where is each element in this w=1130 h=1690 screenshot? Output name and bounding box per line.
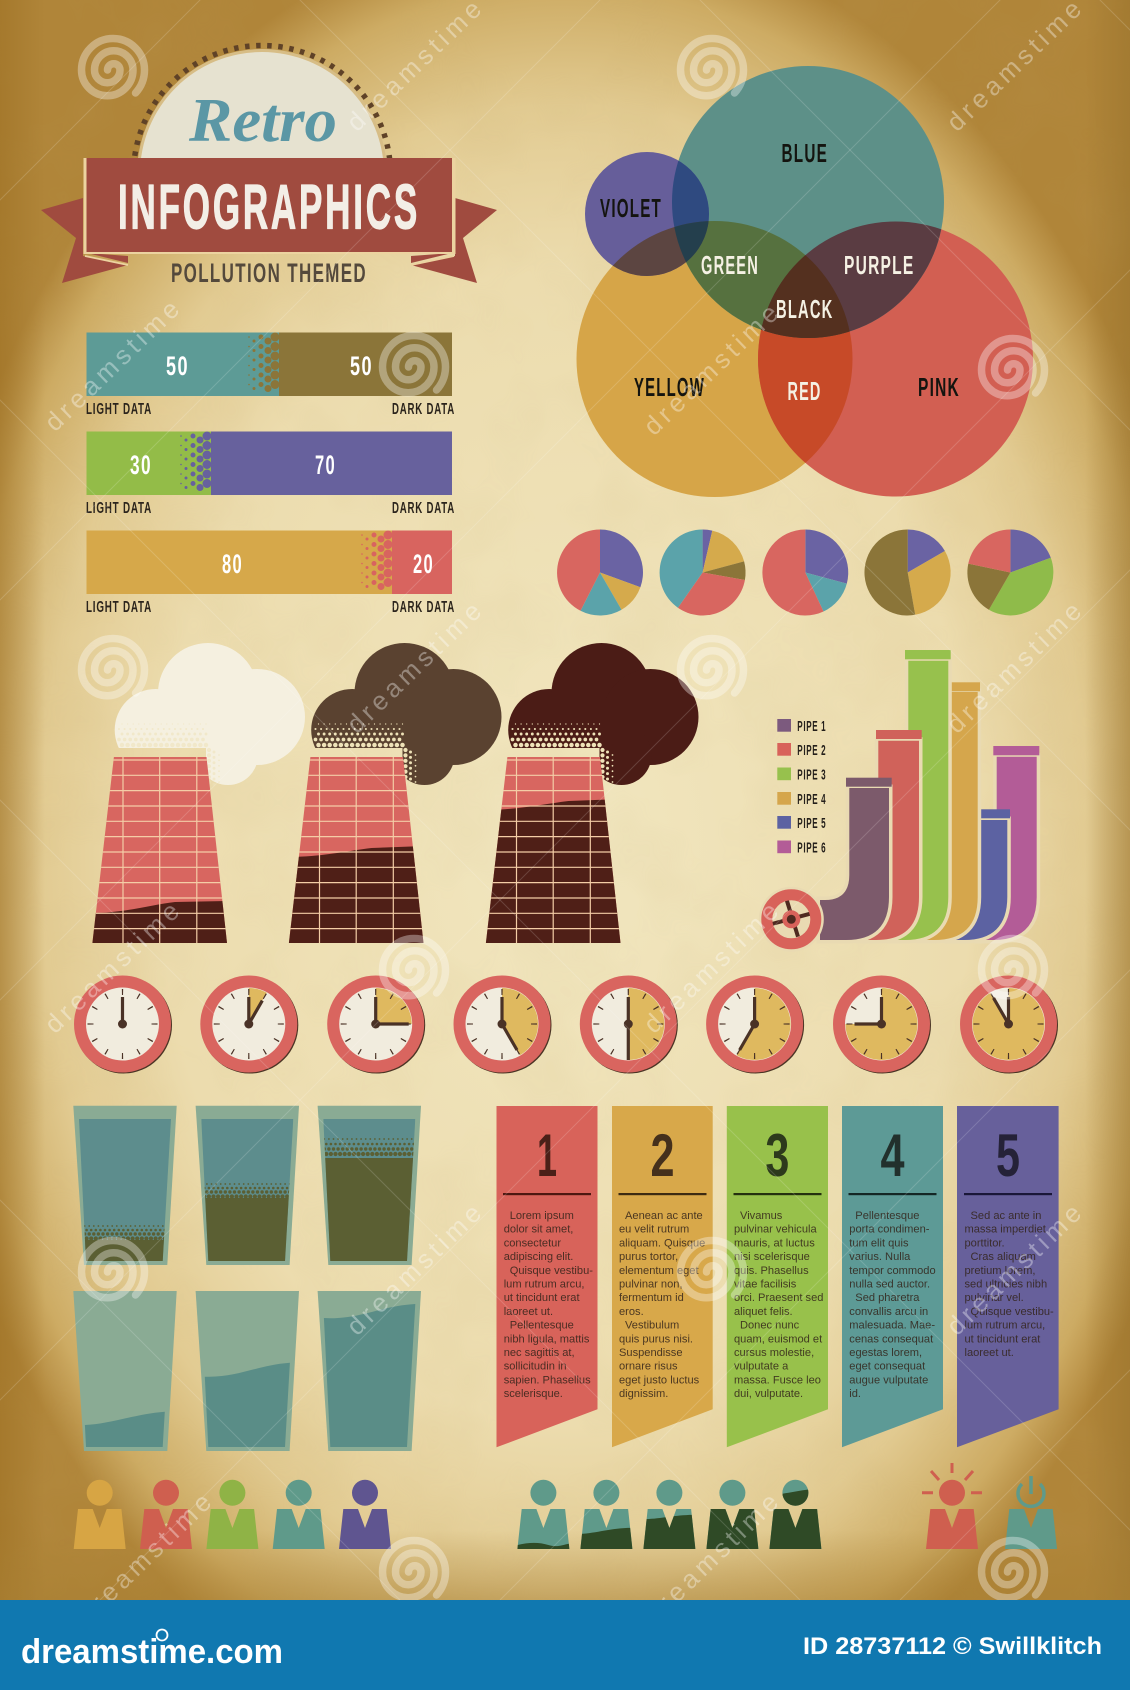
ribbon panel 1: nec sagittis at,: [504, 1347, 575, 1359]
ribbon panel 5: pulvinar vel.: [964, 1292, 1024, 1304]
footer bar: ID 28737112 © Swillklitch: [803, 1633, 1102, 1660]
venn diagram: PINK: [918, 372, 960, 402]
badge: retro seal: [132, 42, 392, 158]
ribbon panel 4: augue vulputate: [849, 1374, 928, 1386]
watermark text: dreamstime: [38, 294, 185, 437]
glass: water high: [318, 1291, 421, 1451]
ribbon panel 1: Pellentesque: [510, 1320, 574, 1332]
smokestack 2 with brown cloud: [286, 643, 502, 945]
ribbon tails: [41, 198, 497, 283]
ribbon panel 1: scelerisque.: [504, 1388, 563, 1400]
ribbon panel 2: purus tortor,: [619, 1251, 678, 1263]
ribbon banner edge: [84, 158, 456, 254]
data bar 2: LIGHT DATA: [86, 500, 152, 517]
watermark text: dreamstime: [940, 596, 1087, 739]
pipe bar chart: [820, 650, 1039, 940]
watermark text: dreamstime: [340, 1198, 487, 1341]
clock 11: [960, 976, 1058, 1074]
data bar 3: [86, 530, 455, 616]
footer bar: dreamstime.com: [21, 1633, 283, 1671]
ribbon panel 5: Quisque vestibu-: [970, 1306, 1054, 1318]
title: Infographics: INFOGRAPHICS: [118, 172, 420, 242]
ribbon panel 2: 2: [650, 1122, 674, 1189]
pipe legend: PIPE 4: [797, 791, 826, 808]
watermark swirls: [82, 38, 1044, 1598]
ribbon panel 4: cenas consequat: [849, 1333, 933, 1345]
ribbon panel 3: aliquet felis.: [734, 1306, 793, 1318]
ribbon panel 2: aliquam. Quisque: [619, 1237, 705, 1249]
icon: person with light bulb head: [922, 1463, 982, 1549]
ribbon panel 5: ut tincidunt erat: [964, 1333, 1040, 1345]
ribbon panel 2: ornare risus: [619, 1361, 678, 1373]
ribbon panel 5: pretium lorem,: [964, 1265, 1035, 1277]
title word: Retro: Retro: [188, 87, 337, 155]
clock 6: [580, 976, 678, 1074]
ribbon panel 5: porttitor.: [964, 1237, 1005, 1249]
data bar 3: LIGHT DATA: [86, 599, 152, 616]
ribbon panel 1: Lorem ipsum: [510, 1210, 574, 1222]
ribbon panel 1: 1: [537, 1122, 557, 1189]
ribbon panel 2: eget justo luctus: [619, 1374, 700, 1386]
clock 3: [327, 976, 425, 1074]
ribbon panel 2: dignissim.: [619, 1388, 668, 1400]
ribbon panel 2: Suspendisse: [619, 1347, 683, 1359]
icon: person with power button head: [1005, 1476, 1057, 1549]
ribbon panel 2: eros.: [619, 1306, 644, 1318]
pie chart 1: [557, 530, 643, 615]
ribbon panel 3: 3: [765, 1122, 789, 1189]
ribbon panel 3: quis. Phasellus: [734, 1265, 809, 1277]
ribbon panel 1: adipiscing elit.: [504, 1251, 573, 1263]
ribbon panel 4: Sed pharetra: [855, 1292, 920, 1304]
ribbon panel 4: varius. Nulla: [849, 1251, 911, 1263]
watermark text: dreamstime: [340, 596, 487, 739]
venn diagram: GREEN: [701, 250, 759, 280]
ribbon panel 5: laoreet ut.: [964, 1347, 1014, 1359]
ribbon panel 4: tum elit quis: [849, 1237, 909, 1249]
data bar 3: 80: [222, 549, 243, 579]
ribbon panel 1: consectetur: [504, 1237, 561, 1249]
ribbon panel 4: id.: [849, 1388, 861, 1400]
ribbon panel 4: egestas lorem,: [849, 1347, 922, 1359]
ribbon panel 5: sed ultricies nibh: [964, 1278, 1047, 1290]
ribbon panel 4: 4: [880, 1122, 905, 1189]
pipe legend: PIPE 3: [797, 766, 826, 784]
watermark text: dreamstime: [70, 1487, 217, 1630]
ribbon panel 3: mauris, at luctus: [734, 1237, 815, 1249]
venn diagram: PURPLE: [844, 250, 914, 280]
ribbon panel 2: Vestibulum: [625, 1320, 679, 1332]
pipe 5: [948, 809, 1010, 940]
venn diagram: VIOLET: [600, 193, 662, 223]
glass: polluted low: [73, 1106, 177, 1265]
people row: five colours: [74, 1480, 391, 1549]
ribbon panel 5: Sed ac ante in: [970, 1210, 1041, 1222]
pipe legend: [777, 718, 826, 856]
ribbon panel 2: fermentum id: [619, 1292, 684, 1304]
ribbon panel 2: elementum eget: [619, 1265, 699, 1277]
pipe 6: [978, 746, 1039, 940]
ribbon panel 4: porta condimen-: [849, 1224, 930, 1236]
data bar 1: [86, 332, 455, 418]
valve wheel: [759, 887, 824, 952]
glass: water low: [73, 1291, 177, 1451]
clock 12: [74, 976, 172, 1074]
pipe legend: PIPE 1: [797, 718, 826, 735]
watermark text: dreamstime: [637, 896, 784, 1039]
ribbon panel 1: ut tincidunt erat: [504, 1292, 580, 1304]
subtitle: POLLUTION THEMED: [171, 258, 367, 288]
clock 7: [706, 976, 804, 1074]
ribbon panel 4: eget consequat: [849, 1361, 925, 1373]
ribbon panel 2: quis purus nisi.: [619, 1333, 693, 1345]
pipe legend: PIPE 2: [797, 742, 826, 759]
venn diagram: RED: [788, 376, 822, 406]
ribbon panel 2: pulvinar non,: [619, 1278, 683, 1290]
data bar 1: 50: [350, 351, 373, 381]
data bar 1: LIGHT DATA: [86, 401, 152, 418]
glass: water medium: [196, 1291, 299, 1451]
smokestack 3 with dark cloud: [484, 643, 698, 945]
ribbon panel 5: 5: [996, 1122, 1020, 1189]
clock 1: [200, 976, 298, 1074]
ribbon panel 1: Quisque vestibu-: [510, 1265, 593, 1277]
ribbon panel 1: dolor sit amet,: [504, 1224, 573, 1236]
ribbon panel 3: vulputate a: [734, 1361, 789, 1373]
data bar 2: 70: [315, 450, 336, 480]
data bar 2: 30: [130, 450, 152, 480]
smokestack 1 with white cloud: [90, 643, 305, 945]
watermark text: dreamstime: [940, 1198, 1087, 1341]
pipe 1: [820, 778, 892, 940]
ribbon panel 3: Vivamus: [740, 1210, 783, 1222]
glass: polluted medium: [196, 1106, 299, 1265]
watermark text: dreamstime: [637, 298, 784, 441]
ribbon panel 4: convallis arcu in: [849, 1306, 928, 1318]
ribbon panel 4: Pellentesque: [855, 1210, 919, 1222]
ribbon panel 4: [842, 1106, 943, 1447]
ribbon panel 5: lum rutrum arcu,: [964, 1320, 1045, 1332]
ribbon panel 5: Cras aliquam: [970, 1251, 1036, 1263]
ribbon panel 2: eu velit rutrum: [619, 1224, 689, 1236]
pipe legend: PIPE 6: [797, 840, 826, 856]
ribbon face: [86, 158, 452, 252]
venn diagram: YELLOW: [634, 372, 705, 402]
ribbon panel 3: pulvinar vehicula: [734, 1224, 817, 1236]
ribbon panel 1: lum rutrum arcu,: [504, 1278, 584, 1290]
ribbon panel 3: cursus molestie,: [734, 1347, 814, 1359]
ribbon panel 4: tempor commodo: [849, 1265, 936, 1277]
data bar 3: DARK DATA: [392, 599, 455, 616]
people row: rising pollution: [513, 1480, 825, 1552]
glass: polluted high: [318, 1106, 421, 1265]
data bar 2: DARK DATA: [392, 500, 455, 517]
ribbon panel 1: [496, 1106, 598, 1447]
ribbon panel 1: sollicitudin in: [504, 1361, 567, 1373]
ribbon panel 3: quam, euismod et: [734, 1333, 822, 1345]
ribbon panel 4: nulla sed auctor.: [849, 1278, 930, 1290]
ribbon panel 1: nibh ligula, mattis: [504, 1333, 590, 1345]
watermark text: dreamstime: [637, 1487, 784, 1630]
watermark text: dreamstime: [38, 896, 185, 1039]
ribbon panel 3: Donec nunc: [740, 1320, 800, 1332]
clock 5: [454, 976, 552, 1074]
ribbon panel 5: [957, 1106, 1059, 1447]
ribbon panel 4: malesuada. Mae-: [849, 1320, 935, 1332]
pie chart 5: [967, 530, 1053, 615]
data bar 1: DARK DATA: [392, 401, 455, 418]
pipe 2: [860, 730, 922, 940]
ribbon panel 3: dui, vulputate.: [734, 1388, 803, 1400]
pie chart 3: [762, 530, 848, 615]
data bar 1: 50: [166, 351, 189, 381]
pipe legend: PIPE 5: [797, 815, 826, 832]
ribbon panel 2: Aenean ac ante: [625, 1210, 703, 1222]
ribbon panel 3: orci. Praesent sed: [734, 1292, 823, 1304]
ribbon panel 1: laoreet ut.: [504, 1306, 553, 1318]
ribbon panel 3: vitae facilisis: [734, 1278, 797, 1290]
ribbon panel 3: nisi scelerisque: [734, 1251, 810, 1263]
ribbon panel 1: sapien. Phasellus: [504, 1374, 591, 1386]
pie chart 2: [660, 530, 746, 615]
pipe 4: [920, 682, 980, 940]
ribbon panel 3: massa. Fusce leo: [734, 1374, 821, 1386]
venn diagram: [576, 66, 1033, 497]
venn diagram: BLACK: [776, 294, 834, 324]
clock 9: [833, 976, 931, 1074]
venn diagram: BLUE: [782, 138, 828, 168]
data bar 3: 20: [413, 549, 434, 579]
ribbon panel 2: [612, 1106, 713, 1447]
pie chart 4: [864, 529, 951, 615]
footer bar: [0, 1600, 1130, 1690]
pipe 3: [890, 650, 951, 940]
ribbon panel 3: [727, 1106, 828, 1447]
ribbon panel 5: massa imperdiet: [964, 1224, 1046, 1236]
data bar 2: [86, 432, 455, 517]
